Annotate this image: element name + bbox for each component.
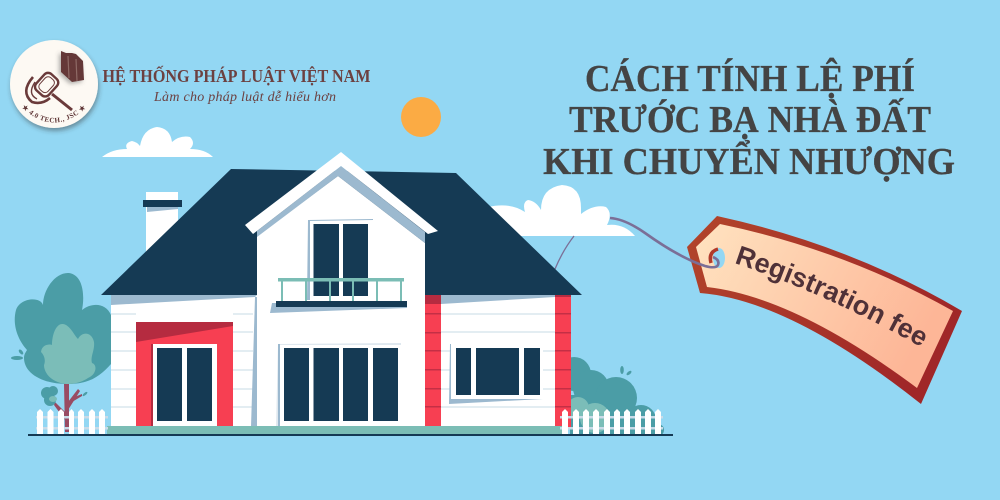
- cloud right: [488, 185, 635, 236]
- bush right: [557, 357, 664, 436]
- tag string: [610, 218, 718, 267]
- icon: books: [61, 51, 84, 82]
- tag hole: [713, 248, 725, 268]
- logo badge: [8, 40, 102, 134]
- tag label: Registration fee: [736, 246, 926, 345]
- chimney: [143, 192, 182, 254]
- ground: [28, 426, 673, 436]
- red pillars: [424, 295, 571, 427]
- gable trim: [245, 152, 438, 234]
- left wing wall: [111, 295, 257, 427]
- icon: sun: [401, 97, 441, 137]
- cloud left: [102, 127, 213, 157]
- right window: [449, 343, 543, 404]
- centre gable wall: [257, 176, 425, 427]
- tree foliage light: [41, 324, 95, 384]
- fence left: [36, 409, 108, 434]
- roof: [101, 169, 582, 295]
- registration fee tag: [687, 216, 962, 404]
- fence right: [560, 409, 663, 434]
- tag face: [696, 224, 953, 388]
- brand name: HỆ THỐNG PHÁP LUẬT VIỆT NAM: [102, 65, 370, 86]
- title: CÁCH TÍNH LỆ PHÍ: [585, 58, 915, 100]
- balcony: [270, 278, 407, 313]
- red door surround: [136, 322, 233, 427]
- icon: magnifier gavel: [26, 71, 72, 110]
- string behind cloud: [555, 236, 574, 269]
- tree foliage dark: [15, 273, 111, 384]
- right wing wall: [424, 295, 571, 427]
- tree trunk: [54, 384, 82, 432]
- upper window: [307, 219, 376, 301]
- title: [543, 58, 955, 183]
- title: TRƯỚC BẠ NHÀ ĐẤT: [569, 98, 931, 141]
- leaves: [11, 349, 88, 406]
- tag border: [687, 216, 962, 404]
- title: KHI CHUYỂN NHƯỢNG: [543, 140, 955, 183]
- tree left: [11, 273, 111, 432]
- logo caption: ★ 4.0 TECH., JSC ★: [22, 105, 86, 123]
- brand slogan: Làm cho pháp luật dễ hiểu hơn: [153, 90, 336, 105]
- lower window: [276, 343, 401, 427]
- house: [101, 152, 582, 427]
- gable shade: [257, 166, 425, 243]
